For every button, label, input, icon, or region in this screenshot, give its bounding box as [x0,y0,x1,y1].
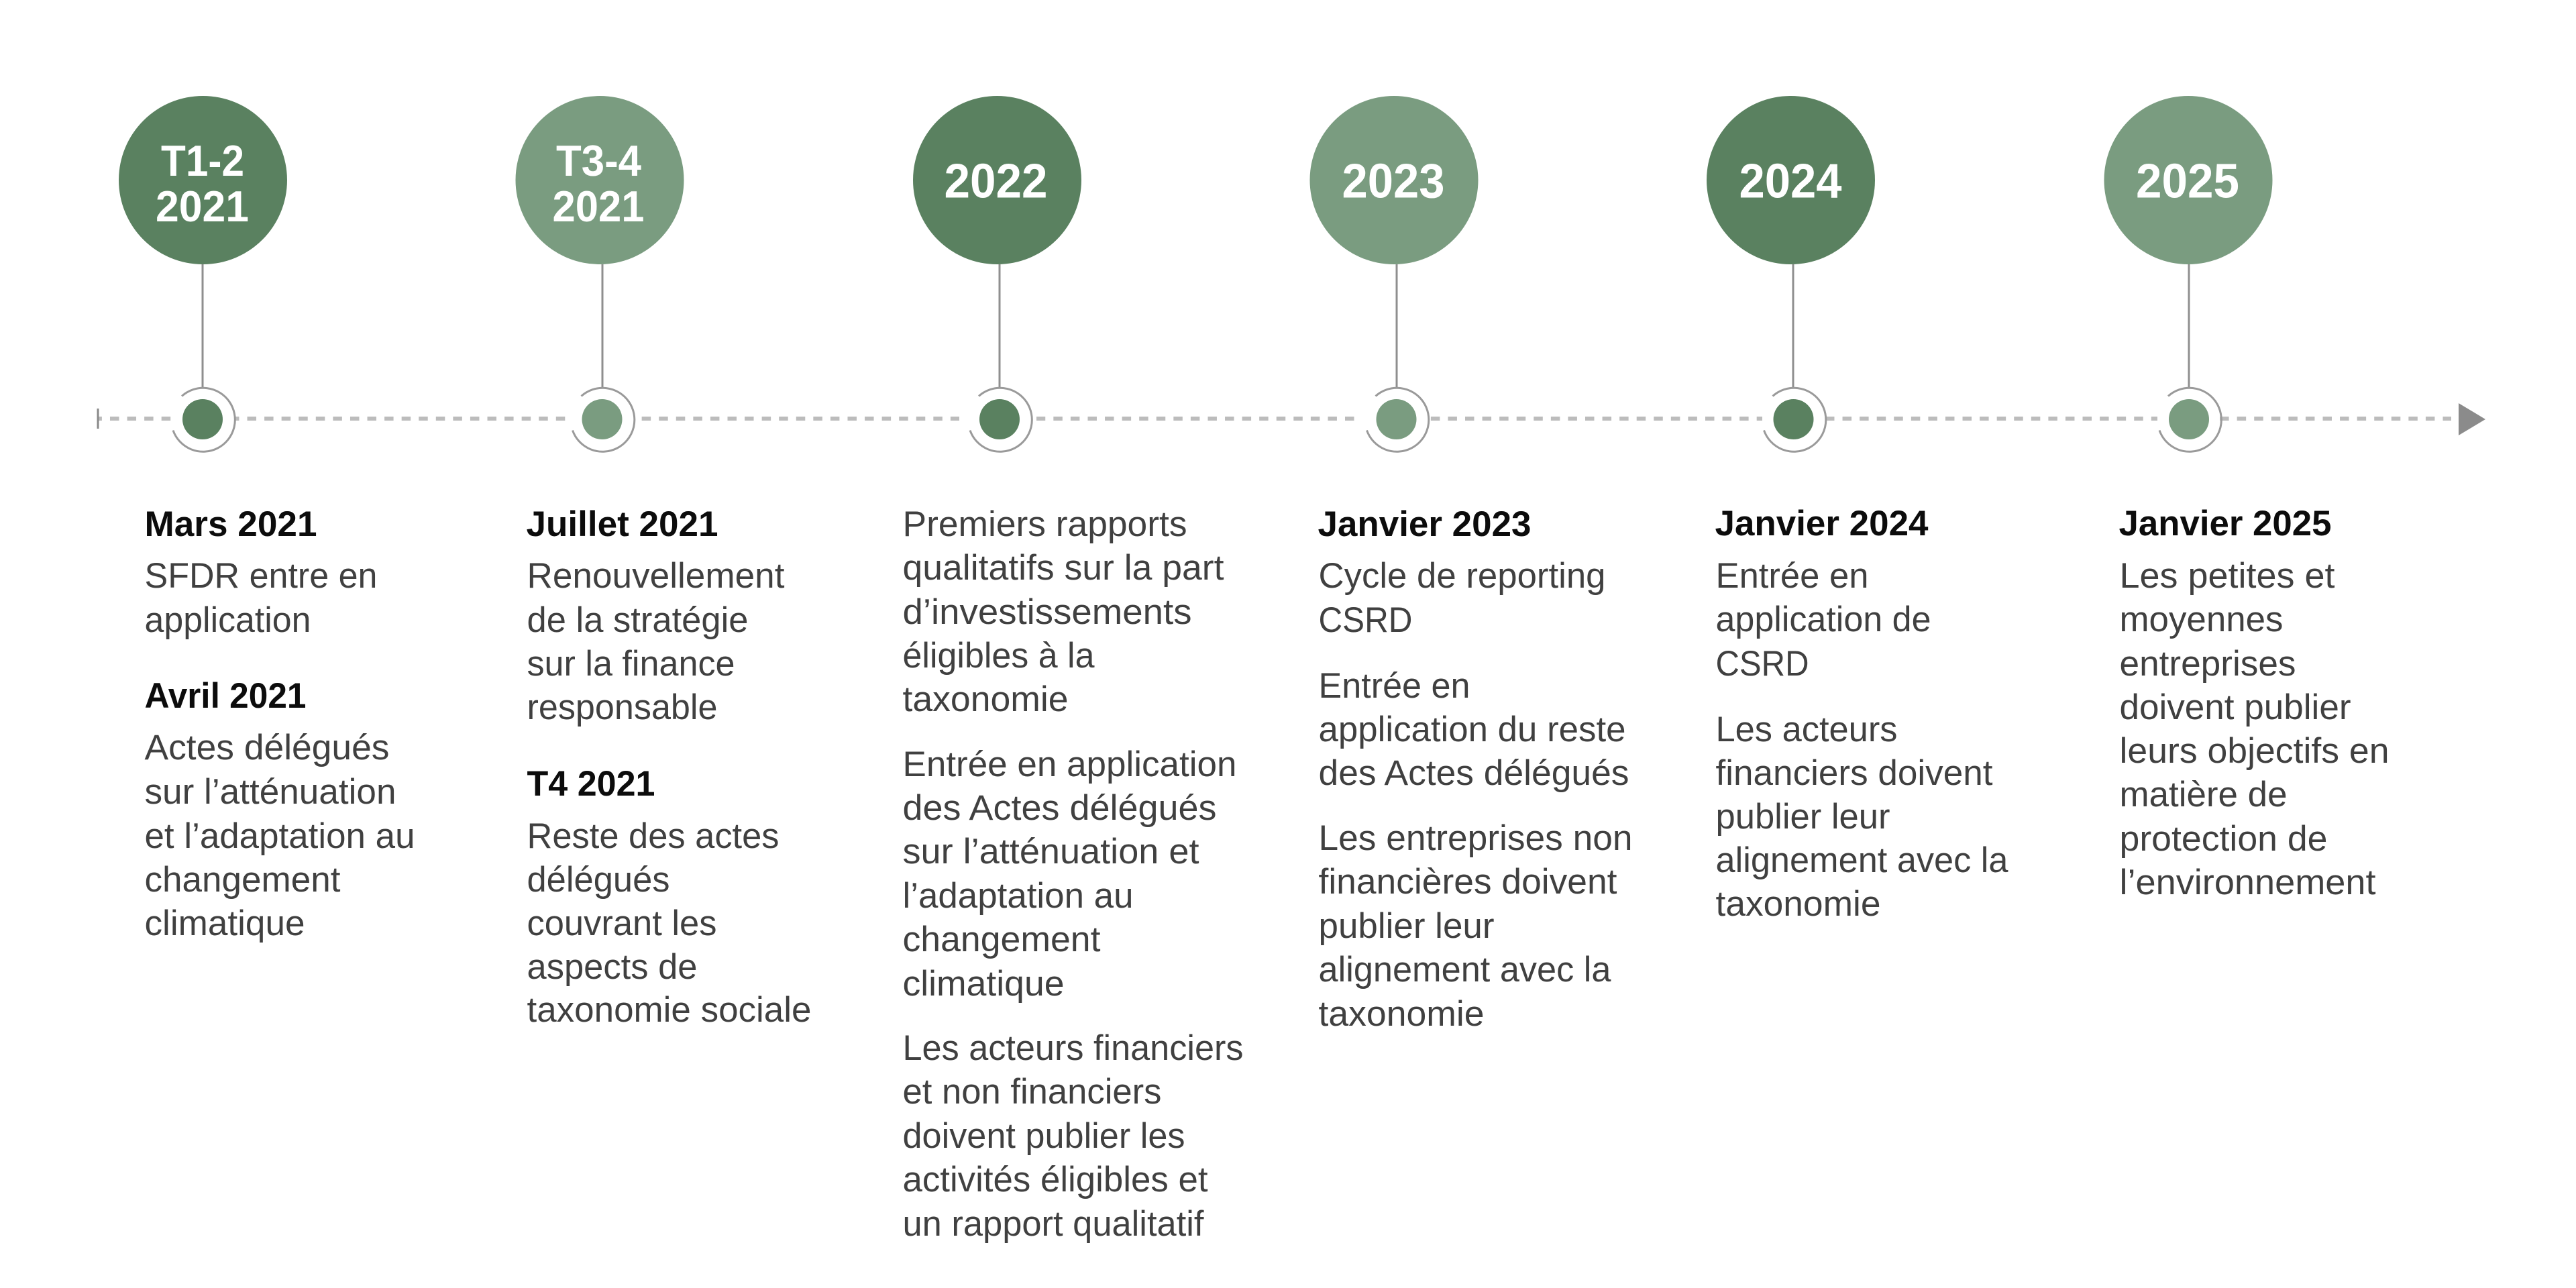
text block: entrée en application: application de [1716,600,1931,639]
text block: taxonomie sociale: couvrant les [527,904,716,943]
text block: petites et moyennes entreprises: moyennes [2120,600,2284,639]
text block: petites et moyennes entreprises: protection de [2120,819,2328,859]
text block: entreprises non financières: alignement avec la [1319,950,1611,989]
text block: acteurs financiers: publier leur [1716,797,1890,837]
bubble label: 2021 [156,182,249,231]
text block: premiers rapports: d’investissements [903,592,1191,632]
text block: entrée en application [1319,666,1629,793]
text block: actes délégués: climatique [145,904,305,943]
arrowhead [2459,403,2485,435]
year bubble [515,96,684,264]
text block: taxonomie sociale: délégués [527,860,669,900]
connector and marker [1367,264,1429,451]
text column: T1-2 2021 [145,504,415,943]
text column: 2022 [903,504,1244,1244]
text block: entrée en application: CSRD [1716,644,1809,684]
text block: entrée en application: application du reste [1319,710,1626,749]
text column: 2023 [1318,504,1633,1034]
text block: actes délégués: changement [903,920,1101,959]
text block: premiers rapports: qualitatifs sur la part [903,548,1224,588]
heading: Avril 2021: Avril 2021 [145,676,306,716]
text block: SFDR: SFDR entre en [145,556,377,596]
milestone: 2025 [2104,96,2273,451]
text block: taxonomie sociale: aspects de [527,947,698,987]
bubble label: T3-4 [556,136,641,185]
text block: acteurs financiers: un rapport qualitatif [903,1204,1204,1244]
text block: actes délégués: changement [145,860,341,900]
text block: actes délégués: Entrée en application [903,745,1237,784]
text column: 2025 [2118,504,2390,902]
bubble label: 2023 [1342,154,1445,208]
milestone: 2023 [1309,96,1479,451]
text block: CSRD: Cycle de reporting [1319,556,1606,596]
heading: Janvier 2023: Janvier 2023 [1318,504,1531,544]
text block: acteurs financiers: Les acteurs [1716,710,1897,749]
text block: acteurs financiers: Les acteurs financiers [903,1028,1244,1068]
text block: acteurs financiers [903,1028,1244,1244]
text block: stratégie: Renouvellement [527,556,785,596]
bubble label [553,136,644,231]
milestone: 2022 [913,96,1081,451]
text block: petites et moyennes entreprises: doivent publier [2120,688,2351,727]
text block: entrée en application: Entrée en [1716,556,1869,596]
text block: stratégie: de la stratégie [527,600,749,640]
text block: acteurs financiers: doivent publier les [903,1116,1185,1156]
text block: entreprises non financières: Les entreprises non [1319,818,1633,858]
year bubble [2104,96,2273,264]
heading: T4 2021: T4 2021 [527,764,655,804]
text block: actes délégués: et l’adaptation au [145,816,415,856]
text block: premiers rapports: éligibles à la [903,636,1095,676]
year bubble [1309,96,1479,264]
text block: actes délégués [903,745,1237,1004]
milestone: 2024 [1707,96,1875,451]
text block: petites et moyennes entreprises: matière de [2120,775,2288,814]
text block: actes délégués: climatique [903,964,1064,1004]
text block: taxonomie sociale: taxonomie sociale [527,990,812,1030]
bubble label: 2025 [2136,154,2239,208]
text block: entrée en application: Entrée en [1319,666,1470,706]
text block: entreprises non financières: publier leur [1319,906,1495,946]
text block: CSRD: CSRD [1319,600,1413,640]
text block: petites et moyennes entreprises: entreprises [2120,644,2296,684]
heading: Juillet 2021: Juillet 2021 [526,504,718,544]
text block: stratégie: sur la finance [527,644,735,684]
milestone: T1-2 2021 [119,96,287,451]
text block: stratégie: responsable [527,688,718,727]
text block: actes délégués: sur l’atténuation et [903,832,1199,871]
text block: acteurs financiers [1716,710,2008,924]
text block: entreprises non financières: financières doivent [1319,862,1617,902]
text block: SFDR: application [145,600,311,640]
text block: taxonomie sociale: Reste des actes [527,816,780,856]
text block: entrée en application: des Actes délégués [1319,753,1629,793]
text block: acteurs financiers: financiers doivent [1716,753,1993,793]
timeline axis [67,409,2451,429]
bubble label: T1-2 [161,136,244,185]
bubble label: 2021 [553,182,644,231]
connector and marker [573,264,635,451]
text block: taxonomie sociale [527,816,812,1030]
heading: Janvier 2024: Janvier 2024 [1715,504,1929,543]
text block: acteurs financiers: alignement avec la [1716,841,2008,880]
text block: entrée en application [1716,556,1931,684]
text block: entreprises non financières: taxonomie [1319,994,1484,1034]
text block: actes délégués [145,728,415,943]
text block: premiers rapports: taxonomie [903,680,1068,719]
connector and marker [173,264,235,451]
bubble label: 2022 [945,154,1048,208]
text column: 2024 [1715,504,2008,924]
text block: actes délégués: sur l’atténuation [145,772,396,812]
year bubble [913,96,1081,264]
connector and marker [2159,264,2221,451]
text block: petites et moyennes entreprises [2120,556,2390,902]
text block: premiers rapports [903,504,1224,719]
text block: acteurs financiers: activités éligibles et [903,1160,1208,1199]
text block: stratégie [527,556,785,727]
text block: acteurs financiers: et non financiers [903,1072,1162,1112]
text block: actes délégués: des Actes délégués [903,788,1217,828]
text block: petites et moyennes entreprises: l’environnement [2120,863,2376,902]
bubble label [156,136,249,231]
bubble label: 2024 [1739,154,1842,208]
text block: SFDR [145,556,377,640]
text column: T3-4 2021 [526,504,812,1030]
year bubble [119,96,287,264]
text block: entreprises non financières [1319,818,1633,1034]
text block: premiers rapports: Premiers rapports [903,504,1187,544]
connector and marker [970,264,1032,451]
milestone: T3-4 2021 [515,96,684,451]
year bubble [1707,96,1875,264]
text block: petites et moyennes entreprises: Les petites et [2120,556,2335,596]
text block: petites et moyennes entreprises: leurs objectifs en [2120,731,2390,771]
connector and marker [1764,264,1826,451]
heading: Mars 2021: Mars 2021 [145,504,317,544]
text block: actes délégués: Actes délégués [145,728,389,767]
text block: acteurs financiers: taxonomie [1716,884,1881,924]
text block: CSRD [1319,556,1606,640]
heading: Janvier 2025: Janvier 2025 [2118,504,2332,543]
text block: actes délégués: l’adaptation au [903,876,1134,916]
